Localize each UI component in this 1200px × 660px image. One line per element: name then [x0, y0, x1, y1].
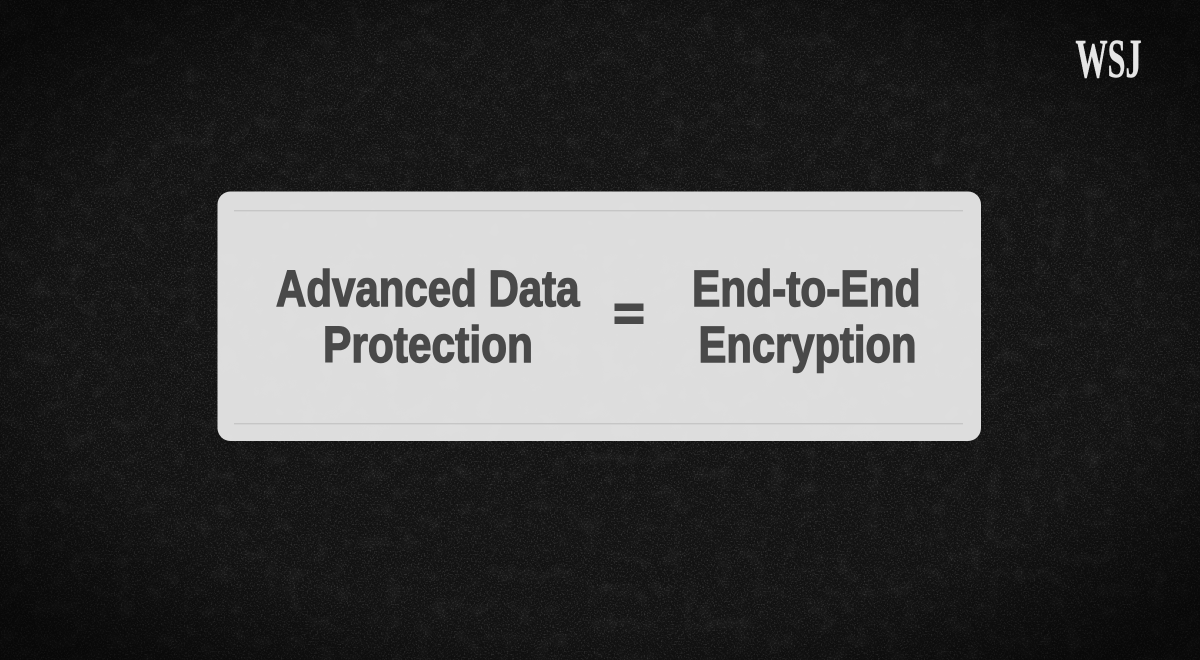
heading: End-to-End Encryption: Encryption [698, 316, 916, 373]
icon: equals sign [614, 304, 644, 324]
heading: End-to-End Encryption [692, 260, 920, 373]
heading: Advanced Data Protection [276, 260, 580, 373]
WSJ logo: WSJ [1076, 28, 1142, 89]
panel: equation card [218, 192, 981, 441]
heading: Advanced Data Protection: Protection [323, 316, 533, 373]
heading: End-to-End Encryption: End-to-End [692, 260, 920, 317]
heading: Advanced Data Protection: Advanced Data [276, 260, 580, 317]
